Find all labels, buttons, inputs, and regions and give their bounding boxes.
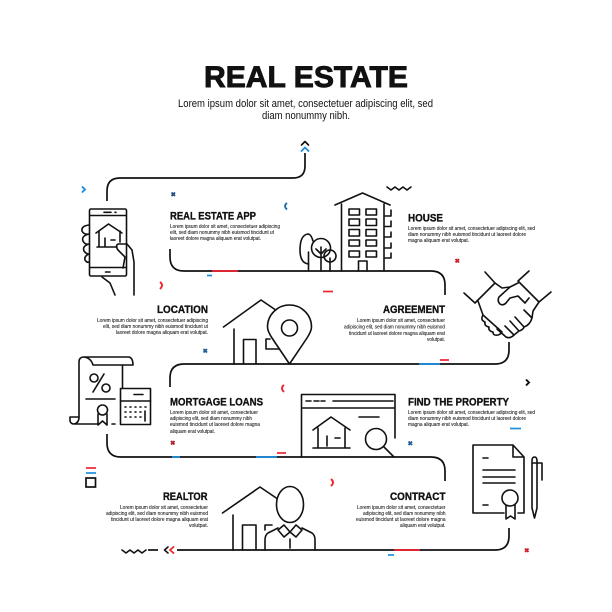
- text: house: [408, 226, 535, 244]
- heading: realtor: REALTOR: [163, 491, 208, 503]
- text: house: diam nonummy nibh euismod tincidunt ut laoreet dolore: [408, 232, 526, 238]
- subtitle: Lorem ipsum dolor sit amet, consectetuer adipiscing elit, sed: [178, 98, 433, 110]
- text: mortgage loans: Lorem ipsum dolor sit amet, consectetuer: [170, 410, 258, 416]
- text: find the property: diam nonummy nibh euismod tincidunt ut laoreet dolore: [408, 416, 526, 422]
- connector path: contract to realtor: [148, 528, 509, 550]
- text: contract: [356, 505, 446, 529]
- text: agreement: tincidunt ut laoreet dolore magna aliquam erat: [349, 331, 446, 337]
- text: agreement: Lorem ipsum dolor sit amet, consectetuer: [357, 318, 445, 324]
- text: agreement: volutpat.: [427, 337, 445, 343]
- text: real estate app: elit, sed diam nonummy nibh euismod tincidunt ut: [170, 230, 275, 236]
- subtitle: diam nonummy nibh.: [262, 110, 350, 122]
- text: contract: euismod tincidunt ut laoreet dolore magna: [356, 517, 446, 523]
- icon: contract and pen: [473, 445, 542, 519]
- text: contract: aliquam erat volutpat.: [400, 523, 446, 529]
- text: location: [97, 318, 209, 336]
- text: realtor: Lorem ipsum dolor sit amet, consectetuer: [120, 505, 208, 511]
- heading: agreement: AGREEMENT: [383, 304, 445, 316]
- text: find the property: magna aliquam erat volutpat.: [408, 422, 469, 428]
- text: real estate app: Lorem ipsum dolor sit amet, consectetuer adipiscing: [170, 224, 280, 230]
- heading: contract: CONTRACT: [390, 491, 446, 503]
- icon: house with location pin: [224, 300, 312, 364]
- text: contract: adipiscing elit, sed diam nonummy nibh: [363, 511, 446, 517]
- text: find the property: [408, 410, 535, 428]
- text: realtor: adipiscing elit, sed diam nonummy nibh euismod: [106, 511, 208, 517]
- subtitle: [178, 98, 433, 122]
- icon: handshake: [464, 271, 551, 338]
- icon: realtor and house: [222, 486, 315, 550]
- heading: location: LOCATION: [157, 304, 208, 316]
- text: location: elit, sed diam nonummy nibh euismod tincidunt ut: [103, 324, 209, 330]
- connector path: calculator to contract: [107, 434, 445, 481]
- text: mortgage loans: adipiscing elit, sed diam nonummy nibh: [170, 416, 252, 422]
- text: realtor: tincidunt ut laoreet dolore magna aliquam erat: [111, 517, 209, 523]
- text: mortgage loans: [170, 410, 260, 435]
- text: location: Lorem ipsum dolor sit amet, consectetuer adipiscing: [97, 318, 208, 324]
- text: house: magna aliquam erat volutpat.: [408, 238, 469, 244]
- heading: find the property: FIND THE PROPERTY: [408, 396, 510, 408]
- text: find the property: Lorem ipsum dolor sit amet, consectetuer adipiscing elit, sed: [408, 410, 535, 416]
- decorative accents: small marks: [82, 186, 529, 555]
- icon: browser property search: [302, 394, 395, 457]
- text: agreement: adipiscing elit, sed diam nonummy nibh euismod: [344, 324, 445, 330]
- heading: mortgage loans: MORTGAGE LOANS: [170, 396, 263, 408]
- icon: mortgage document and calculator: [70, 357, 150, 425]
- text: agreement: [344, 318, 446, 343]
- arrow: end chevrons: [164, 547, 174, 553]
- icon: phone in hand: [82, 209, 134, 295]
- text: real estate app: [170, 224, 280, 242]
- heading: real estate app: REAL ESTATE APP: [170, 210, 256, 222]
- heading: house: HOUSE: [408, 212, 443, 224]
- connector path: handshake to mortgage: [170, 342, 509, 387]
- text: contract: Lorem ipsum dolor sit amet, consectetuer: [357, 505, 446, 511]
- connector path: app to agreement: [170, 249, 445, 295]
- text: realtor: volutpat.: [189, 523, 208, 529]
- text: mortgage loans: aliquam erat volutpat.: [170, 429, 215, 435]
- text: real estate app: laoreet dolore magna aliquam erat volutpat.: [170, 236, 261, 242]
- text: house: Lorem ipsum dolor sit amet, consectetuer adipiscing elit, sed: [408, 226, 535, 232]
- connector path: top arrow: [107, 142, 308, 201]
- title: REAL ESTATE: [204, 61, 408, 94]
- icon: apartment building and trees: [300, 193, 391, 271]
- text: mortgage loans: euismod tincidunt ut laoreet dolore magna: [170, 422, 260, 428]
- text: location: laoreet dolore magna aliquam erat volutpat.: [116, 330, 208, 336]
- text: realtor: [106, 505, 209, 529]
